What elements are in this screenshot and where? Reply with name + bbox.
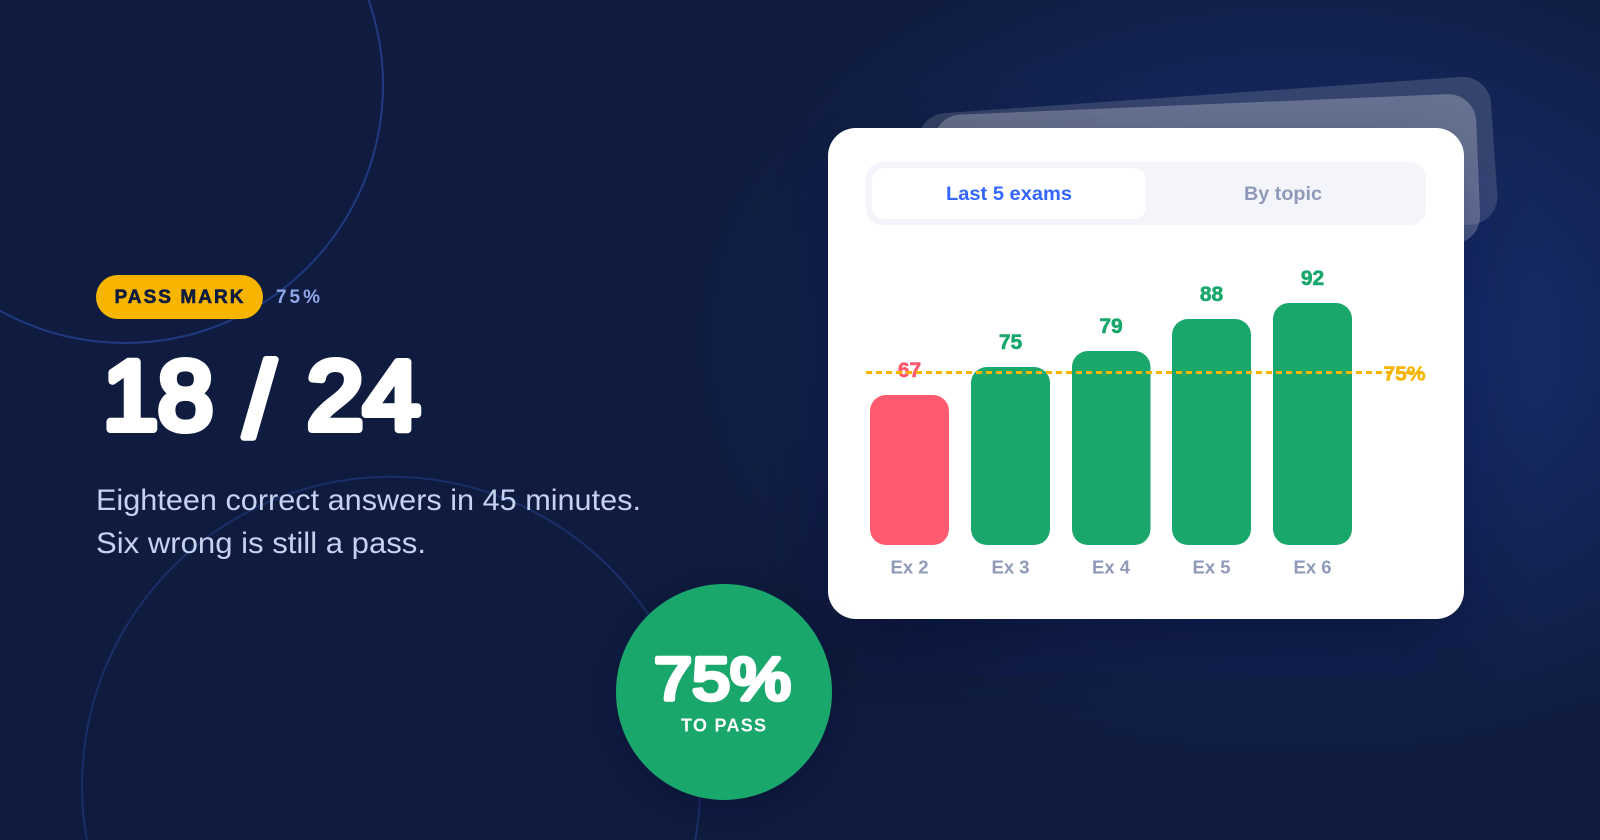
description: Six wrong is still a pass. [96,527,426,560]
pass mark pill: PASS MARK [114,287,244,308]
bar: Ex 4, 79 [1072,315,1150,578]
bar: Ex 3, 75 [971,331,1050,578]
bar: Ex 6, 92: 92 [1301,267,1324,290]
pass mark value: 75% [276,287,320,308]
tab switcher: Last 5 exams [946,184,1072,205]
back card: inner stacked sheet [932,93,1481,266]
headline score [103,341,420,459]
pass threshold line with 75% label: 75% [1384,362,1426,386]
pass mark pill [96,275,263,319]
headline score: 18 [103,341,213,450]
bar chart: last five exam scores [866,267,1426,578]
badge: 75% to pass: TO PASS [681,716,766,736]
tab switcher: By topic [1244,184,1322,205]
bar: Ex 4, 79: Ex 4 [1092,558,1130,578]
back card: outer stacked sheet [916,75,1499,263]
bar: Ex 2, 67: 67 [898,359,921,382]
panel: exam results card [828,128,1464,619]
badge: 75% to pass: 75% [654,646,791,712]
bar: Ex 4, 79: 79 [1099,315,1123,338]
bar: Ex 5, 88: Ex 5 [1192,558,1230,578]
tab switcher [866,162,1426,225]
description: Eighteen correct answers in 45 minutes. [96,484,641,517]
headline score: 24 [307,341,420,450]
bar: Ex 2, 67: Ex 2 [890,558,928,578]
bar: Ex 5, 88 [1172,283,1251,578]
bar: Ex 5, 88: 88 [1200,283,1223,306]
description [96,484,641,560]
bar: Ex 3, 75: Ex 3 [992,558,1030,578]
bar: Ex 6, 92 [1273,267,1352,578]
headline score: / [244,341,276,459]
bar: Ex 6, 92: Ex 6 [1294,558,1332,578]
badge: 75% to pass [616,584,832,800]
bar: Ex 2, 67 [870,359,949,578]
bar: Ex 3, 75: 75 [999,331,1022,354]
